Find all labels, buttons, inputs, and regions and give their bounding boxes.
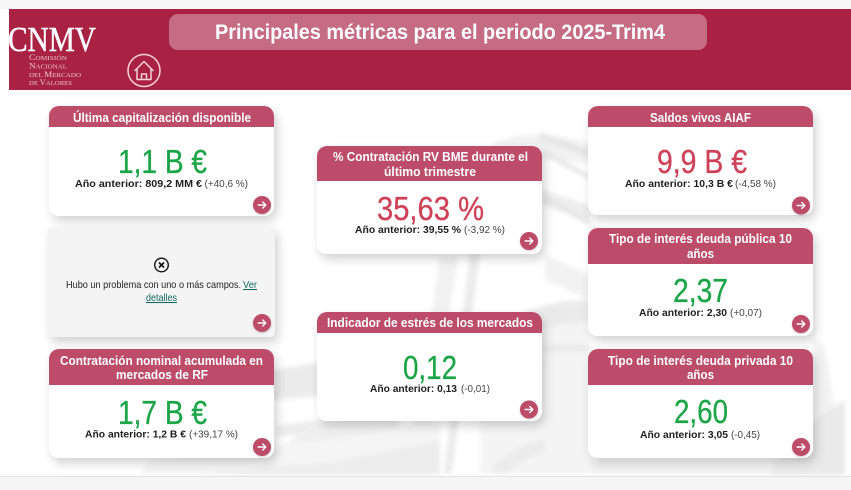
panel: Saldos vivos AIAF: 9,9 B € <box>657 143 747 180</box>
panel: Tipo de interés deuda privada: 2,60 <box>674 393 728 430</box>
CNMV logo: DE VALORES <box>29 77 72 87</box>
panel: Última capitalización disponible <box>49 106 274 216</box>
title <box>169 14 707 50</box>
panel: Tipo de interés deuda privada: años <box>687 367 714 382</box>
panel: Tipo de interés deuda pública: (+0,07) <box>730 307 762 319</box>
panel: Tipo de interés deuda privada: Año anterior: 3,05 <box>640 429 728 441</box>
panel: Indicador de estrés: Indicador de estrés de los mercados <box>327 315 533 330</box>
panel: % Contratación RV BME: último trimestre <box>384 164 476 179</box>
panel: Última capitalización disponible: 1,1 B € <box>118 143 207 180</box>
background building photo <box>140 132 845 475</box>
panel: % Contratación RV BME: 35,63 % <box>377 190 484 227</box>
panel: Tipo de interés deuda pública: Tipo de interés deuda pública 10 <box>609 231 792 246</box>
panel: Saldos vivos AIAF: (-4,58 %) <box>735 178 776 190</box>
panel: Tipo de interés deuda privada: (-0,45) <box>731 429 760 441</box>
panel: % Contratación RV BME: % Contratación RV BME durante el <box>333 149 528 164</box>
panel: Tipo de interés deuda privada: Tipo de interés deuda privada 10 <box>608 353 793 368</box>
panel: Indicador de estrés: 0,12 <box>403 349 457 386</box>
panel: Tipo de interés deuda pública: 2,37 <box>673 272 728 309</box>
CNMV logo: DEL MERCADO <box>29 69 81 79</box>
panel: error message: detalles <box>146 292 177 304</box>
panel: error message <box>48 227 275 337</box>
panel: Indicador de estrés <box>317 312 542 421</box>
panel: error message: Hubo un problema con uno o más campos. <box>66 279 241 291</box>
top strip <box>0 0 851 9</box>
panel: Saldos vivos AIAF <box>588 106 813 215</box>
panel: Saldos vivos AIAF: Saldos vivos AIAF <box>650 110 751 125</box>
panel: Contratación nominal acumulada: (+39,17 %) <box>189 428 238 440</box>
icon: error <box>155 258 168 272</box>
panel: Indicador de estrés: (-0,01) <box>461 383 490 395</box>
CNMV logo: NACIONAL <box>29 60 67 70</box>
panel: Última capitalización disponible: Año anterior: 809,2 MM € <box>75 178 202 190</box>
CNMV logo <box>8 20 96 87</box>
panel: Contratación nominal acumulada: mercados de RF <box>116 367 208 382</box>
panel: Saldos vivos AIAF: Año anterior: 10,3 B € <box>625 178 733 190</box>
panel: Última capitalización disponible: (+40,6 %) <box>204 178 248 190</box>
icon: home <box>128 54 160 86</box>
header band <box>8 9 851 90</box>
CNMV logo: COMISIÓN <box>29 52 67 62</box>
panel: Contratación nominal acumulada <box>49 349 274 458</box>
panel: Tipo de interés deuda pública <box>588 228 813 336</box>
panel: % Contratación RV BME <box>317 146 542 254</box>
panel: Contratación nominal acumulada: Año anterior: 1,2 B € <box>85 428 186 440</box>
panel: % Contratación RV BME: (-3,92 %) <box>464 224 505 236</box>
panel: Contratación nominal acumulada: 1,7 B € <box>118 394 207 431</box>
title: Principales métricas para el periodo 2025-Trim4 <box>215 21 665 44</box>
panel: Tipo de interés deuda pública: años <box>687 246 714 261</box>
panel: Tipo de interés deuda privada <box>588 349 813 458</box>
bottom bar <box>0 476 851 490</box>
panel: % Contratación RV BME: Año anterior: 39,55 % <box>355 224 462 236</box>
CNMV logo: CNMV <box>8 20 96 59</box>
panel: Tipo de interés deuda pública: Año anterior: 2,30 <box>639 307 727 319</box>
panel: Indicador de estrés: Año anterior: 0,13 <box>370 383 457 395</box>
panel: Contratación nominal acumulada: Contratación nominal acumulada en <box>60 353 263 368</box>
panel: Última capitalización disponible: Última capitalización disponible <box>73 110 251 125</box>
panel: error message: Ver <box>243 279 257 291</box>
